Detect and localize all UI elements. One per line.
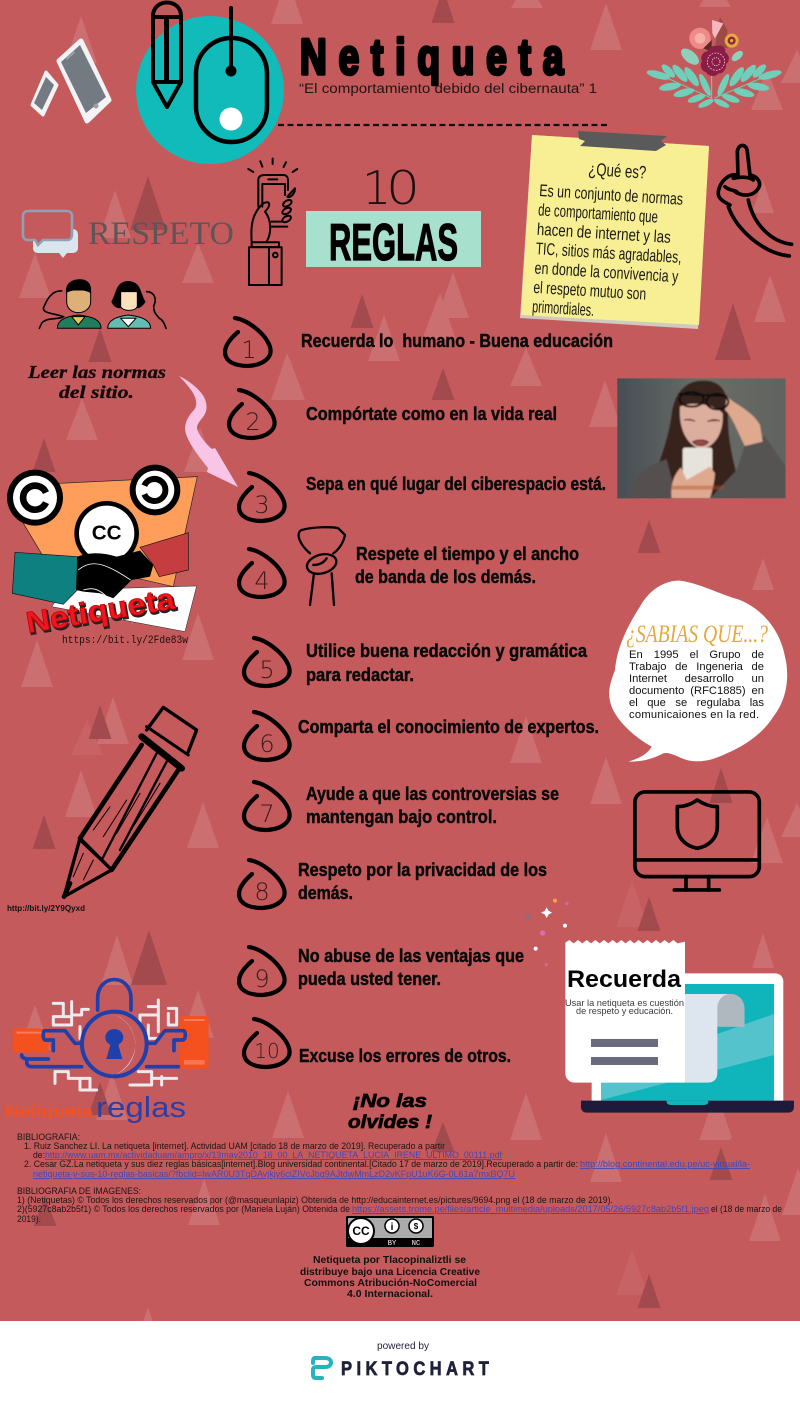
rule 8: Respeto por la privacidad de los xyxy=(298,859,547,880)
icon: cc by-nc badge xyxy=(346,1216,434,1248)
icon: monitor shield xyxy=(635,792,759,890)
rule 4: de banda de los demás. xyxy=(355,566,536,587)
rule 6: 6 xyxy=(259,730,275,758)
callout: no las olvides: ¡No las xyxy=(353,1091,427,1111)
text: image bibliography: el (18 de marzo de xyxy=(711,1204,782,1214)
text: license: Netiqueta por Tlacopinaliztli se xyxy=(313,1254,466,1266)
rule 10: 10 xyxy=(254,1039,280,1063)
rule 10: Excuse los errores de otros. xyxy=(299,1045,511,1066)
icon: teal circle with pencil and mouse xyxy=(136,2,284,164)
icon: tape xyxy=(578,131,667,151)
callout: no las olvides: olvides ! xyxy=(348,1112,432,1132)
icon: flowers xyxy=(646,17,783,110)
text: sabias que body: comunicaiones en la red. xyxy=(629,709,759,721)
rule 3: 3 xyxy=(254,491,270,519)
note text: en donde la convivencia y xyxy=(534,258,679,286)
note text: primordiales. xyxy=(532,297,595,320)
text: bibliography: 1. Ruiz Sanchez LI. La netiqueta [internet]. Actividad UAM [citado 18 de marzo de 2019]. Recuperado a partir xyxy=(24,1141,445,1151)
rule 7 xyxy=(244,782,559,830)
wordmark: PIKTOCHART xyxy=(341,1358,489,1379)
rule 6: Comparta el conocimiento de expertos. xyxy=(298,716,599,737)
text: license: Commons Atribución-NoComercial xyxy=(304,1277,477,1289)
text: license: 4.0 Internacional. xyxy=(347,1288,433,1300)
icon: cc badge xyxy=(74,501,139,566)
rule 4: Respete el tiempo y el ancho xyxy=(356,543,579,564)
text: bibliography xyxy=(17,1132,750,1179)
text: bibliography: 2. Cesar GZ.La netiqueta y sus diez reglas básicas[internet].Blog universidad continental.[Citado 17 de marzo de 2019].Recuperado a partir de: xyxy=(24,1159,578,1169)
text: bibliography: de: xyxy=(33,1150,45,1160)
heading: recuerda: Recuerda xyxy=(567,966,682,993)
text: image bibliography: BIBLIOGRAFIA DE IMAGENES: xyxy=(17,1186,141,1196)
footer: powered by piktochart: powered by xyxy=(377,1340,430,1352)
note text: TIC, sitios más agradables, xyxy=(535,239,682,267)
text: image bibliography: 1) (Netiquetas) © Todos los derechos reservados por (@masqueunlapiz) Obtenida de http://educainternet.es/pictures/9694.png el (18 de marzo de 2019). xyxy=(17,1195,613,1205)
callout: leer las normas: del sitio. xyxy=(59,382,134,402)
icon: copyright left xyxy=(7,470,63,526)
note text: Es un conjunto de normas xyxy=(539,181,684,209)
icon: cc by-nc badge: NC xyxy=(412,1240,420,1248)
rule 3 xyxy=(239,473,606,521)
icon: people xyxy=(39,279,166,328)
rule 7: 7 xyxy=(259,800,275,828)
heading: respeto: RESPETO xyxy=(88,216,234,252)
image: woman with phone xyxy=(613,375,790,502)
text: sabias que body: En 1995 el Grupo de xyxy=(629,649,764,661)
note text: de comportamiento que xyxy=(538,200,659,227)
icon: sketch pencil xyxy=(64,707,197,897)
text: image bibliography: 2019). xyxy=(17,1214,41,1224)
label: netiqueta wordart: Netiqueta xyxy=(25,584,179,642)
icon: pencil xyxy=(153,2,181,107)
rule 9: pueda usted tener. xyxy=(298,968,441,989)
icon: cc badge: CC xyxy=(92,521,122,544)
note text: el respeto mutuo son xyxy=(533,278,647,304)
icon: hand holding phone xyxy=(248,159,297,285)
text: bibliography: http://blog.continental.edu.pe/uc-virtual/la- xyxy=(580,1159,750,1169)
rule 5: 5 xyxy=(259,656,275,684)
subtitle: “El comportamiento debido del cibernauta” 1 xyxy=(299,81,597,96)
rule 1 xyxy=(225,318,613,366)
rule 5 xyxy=(244,638,588,686)
rule 7: mantengan bajo control. xyxy=(306,806,497,827)
number 10: 0 xyxy=(386,161,420,215)
rule 2 xyxy=(229,390,557,438)
reminder text xyxy=(565,998,684,1017)
icon: mouse xyxy=(196,8,267,142)
callout: sabias que bubble xyxy=(609,581,787,762)
icon: cc by-nc badge: $ xyxy=(414,1222,419,1231)
text: bibliography: netiqueta-y-sus-10-reglas-basicas/?fbclid=IwAR0U3TqDAvjkjy6ciZIVcJbg9AJtdwMmLzD2vKFpU1uK6G-0L61a7mxBQ7U xyxy=(33,1169,515,1179)
label: netiqueta wordart: Netiqueta xyxy=(24,583,177,640)
image: creative commons handshake xyxy=(7,465,197,632)
icon: phones xyxy=(32,41,109,121)
rule 1: 1 xyxy=(241,336,257,364)
rule 8: 8 xyxy=(254,878,270,906)
label: netiqueta reglas: Netiqueta xyxy=(5,1102,94,1121)
arrow: pink xyxy=(179,376,238,487)
rule 2: 2 xyxy=(245,408,261,436)
source link: https://bit.ly/2Fde83w xyxy=(62,635,188,647)
text: sabias que body: documento (RFC1885) en xyxy=(629,685,764,697)
panel: reglas xyxy=(306,211,481,272)
callout: leer las normas xyxy=(27,362,166,402)
rule 8: demás. xyxy=(298,882,353,903)
text: sabias que body: Internet desarrollo un xyxy=(629,673,764,685)
reminder text: de respeto y educación. xyxy=(576,1006,673,1017)
rule 9: No abuse de las ventajas que xyxy=(298,945,524,966)
icon: chat bubbles xyxy=(23,211,78,258)
icon: cc by-nc badge: CC xyxy=(352,1224,370,1238)
rule 3: Sepa en qué lugar del ciberespacio está. xyxy=(306,473,606,494)
rule 5: para redactar. xyxy=(306,664,414,685)
rule 9 xyxy=(239,945,524,995)
icon: padlock circuit xyxy=(13,980,209,1090)
title: Netiqueta xyxy=(300,30,564,85)
rule 4 xyxy=(239,543,579,597)
text: bibliography: http://www.uam.mx/actividaduam/ampro/x/13may2010_16_00_LA_NETIQUETA_LUCIA_IRENE_ULTIMO_00111.pdf xyxy=(45,1150,502,1160)
rule 2: Compórtate como en la vida real xyxy=(306,403,557,424)
rule 6 xyxy=(244,712,599,760)
rule 1: Recuerda lo humano - Buena educación xyxy=(301,330,613,351)
icon: cc by-nc badge: i xyxy=(391,1222,394,1233)
icon: rule 4 figure xyxy=(299,527,345,605)
note heading: ¿Qué es? xyxy=(588,159,647,183)
text: image bibliography: 2)(5927c8ab2b5f1) © Todos los derechos reservados por (Mariela Luján) Obtenida de xyxy=(17,1204,350,1214)
rule 9: 9 xyxy=(254,965,270,993)
text: sabias que body: el que se regulaba las xyxy=(629,697,764,709)
text: image bibliography xyxy=(17,1186,782,1224)
reminder text: Usar la netiqueta es cuestión xyxy=(565,998,684,1009)
icon: laptop with paper xyxy=(565,940,794,1113)
footer: powered by piktochart xyxy=(313,1340,489,1379)
label: netiqueta reglas: reglas xyxy=(96,1092,186,1124)
text: sabias que body: Trabajo de Ingeneria de xyxy=(629,661,764,673)
rule 5: Utilice buena redacción y gramática xyxy=(306,640,588,661)
text: bibliography: BIBLIOGRAFIA: xyxy=(17,1132,80,1142)
rule 8 xyxy=(239,859,547,908)
text: license xyxy=(300,1254,480,1300)
icon: pointing finger xyxy=(718,145,792,256)
icon: piktochart logo xyxy=(313,1358,331,1378)
icon: sparkles xyxy=(525,899,569,966)
icon: copyleft right xyxy=(130,465,180,515)
text: license: distribuye bajo una Licencia Creative xyxy=(300,1266,480,1278)
label: netiqueta reglas xyxy=(5,1092,186,1124)
heading: reglas: REGLAS xyxy=(329,214,458,272)
callout: no las olvides xyxy=(348,1091,432,1132)
note text xyxy=(532,181,686,325)
rule 10 xyxy=(244,1019,511,1067)
number 10 xyxy=(362,161,420,215)
note text: hacen de internet y las xyxy=(536,220,671,247)
text: image bibliography: https://assets.trome.pe/files/article_multimedia/uploads/2017/05/26/5927c8ab2b5f1.jpeg xyxy=(352,1204,709,1214)
callout: leer las normas: Leer las normas xyxy=(27,362,166,382)
icon: cc by-nc badge: BY xyxy=(388,1240,397,1248)
rule 7: Ayude a que las controversias se xyxy=(306,783,559,804)
number 10: 1 xyxy=(362,161,391,215)
rule 4: 4 xyxy=(254,567,270,595)
panel: sticky note xyxy=(520,131,709,329)
source link: http://bit.ly/2Y9Qyxd xyxy=(7,903,85,913)
text: sabias que body xyxy=(629,649,764,721)
